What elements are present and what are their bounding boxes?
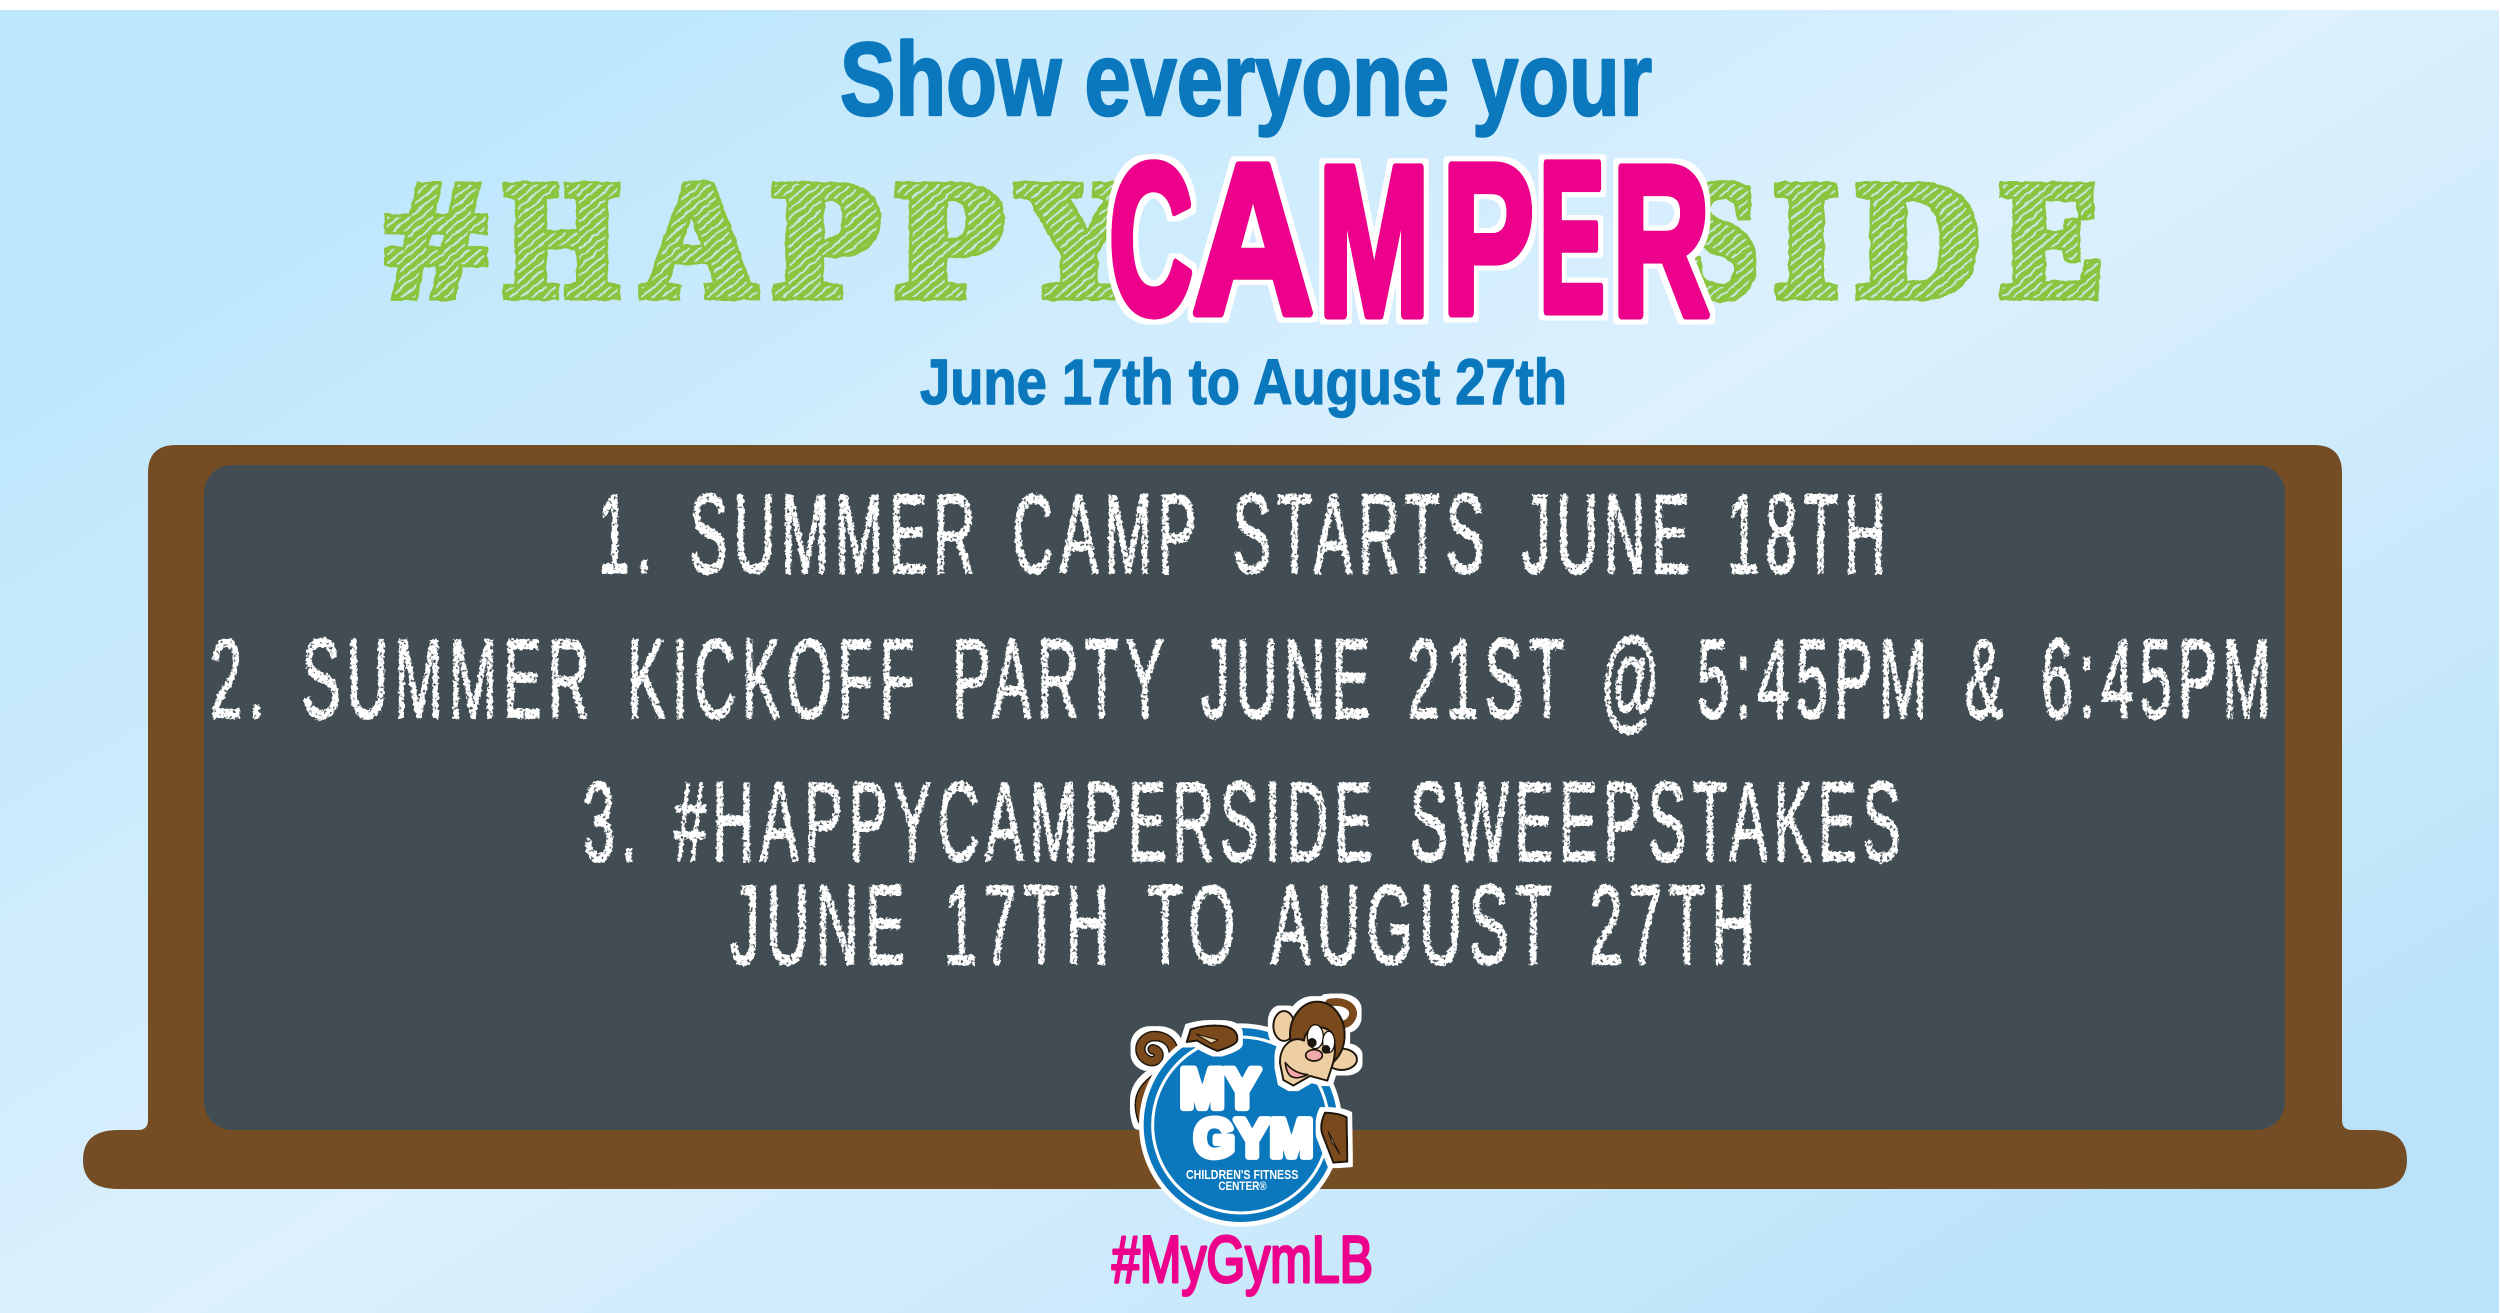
pink word: CAMPER: P (1442, 120, 1534, 359)
face (1280, 1027, 1335, 1086)
green word: #HAPPY: A (642, 148, 756, 331)
eyes (1307, 1025, 1335, 1053)
top hand (1187, 1025, 1237, 1051)
curl of hair (1329, 1002, 1353, 1025)
children's fitness: CHILDREN'S FITNESS (1186, 1167, 1298, 1182)
head (1290, 1002, 1345, 1068)
MY: MY (1180, 1058, 1260, 1120)
circular badge (1139, 1023, 1342, 1227)
ears (1273, 1011, 1357, 1070)
chalk text list (210, 471, 2277, 988)
logo: My Gym with monkey (1139, 1002, 1357, 1227)
green word: SIDE: S (1684, 148, 1758, 331)
chalkboard (83, 445, 2407, 1189)
hashtag: #MyGymLB: #MyGymLB (1112, 1222, 1373, 1296)
pink word: CAMPER: R (1612, 122, 1710, 361)
nose (1306, 1050, 1322, 1061)
subheading: dates: June 17th to August 27th (920, 346, 1567, 418)
green word: #HAPPY (388, 148, 1140, 331)
board surface (204, 465, 2285, 1130)
green word: SIDE: E (2002, 148, 2103, 331)
green word: #HAPPY: # (388, 148, 484, 331)
green word: SIDE: D (1858, 148, 1981, 331)
green word: #HAPPY: P (897, 148, 1004, 331)
green word: SIDE: I (1775, 148, 1838, 331)
monkey tail (1140, 1036, 1174, 1120)
green word: SIDE (1684, 148, 2103, 331)
center: CENTER® (1218, 1179, 1267, 1193)
right hand (1321, 1113, 1347, 1163)
pink word: CAMPER: E (1539, 118, 1605, 357)
mouth (1285, 1063, 1308, 1078)
green word: #HAPPY: Y (1016, 148, 1140, 331)
green word: #HAPPY: P (774, 148, 880, 331)
pink word: CAMPER: M (1318, 122, 1430, 361)
pink word: CAMPER: C (1109, 120, 1193, 359)
board frame and ledge (83, 445, 2407, 1189)
hashtag title: #HAPPYCAMPERSIDE (388, 118, 2103, 361)
logo wordmark (1180, 1058, 1313, 1193)
green word: #HAPPY: H (505, 148, 618, 331)
monkey hands and head (1187, 1002, 1357, 1163)
GYM: GYM (1194, 1110, 1313, 1169)
pink word: CAMPER: A (1192, 120, 1314, 359)
pink word: CAMPER (1109, 118, 1710, 361)
heading: show everyone your: Show everyone your (840, 22, 1652, 138)
